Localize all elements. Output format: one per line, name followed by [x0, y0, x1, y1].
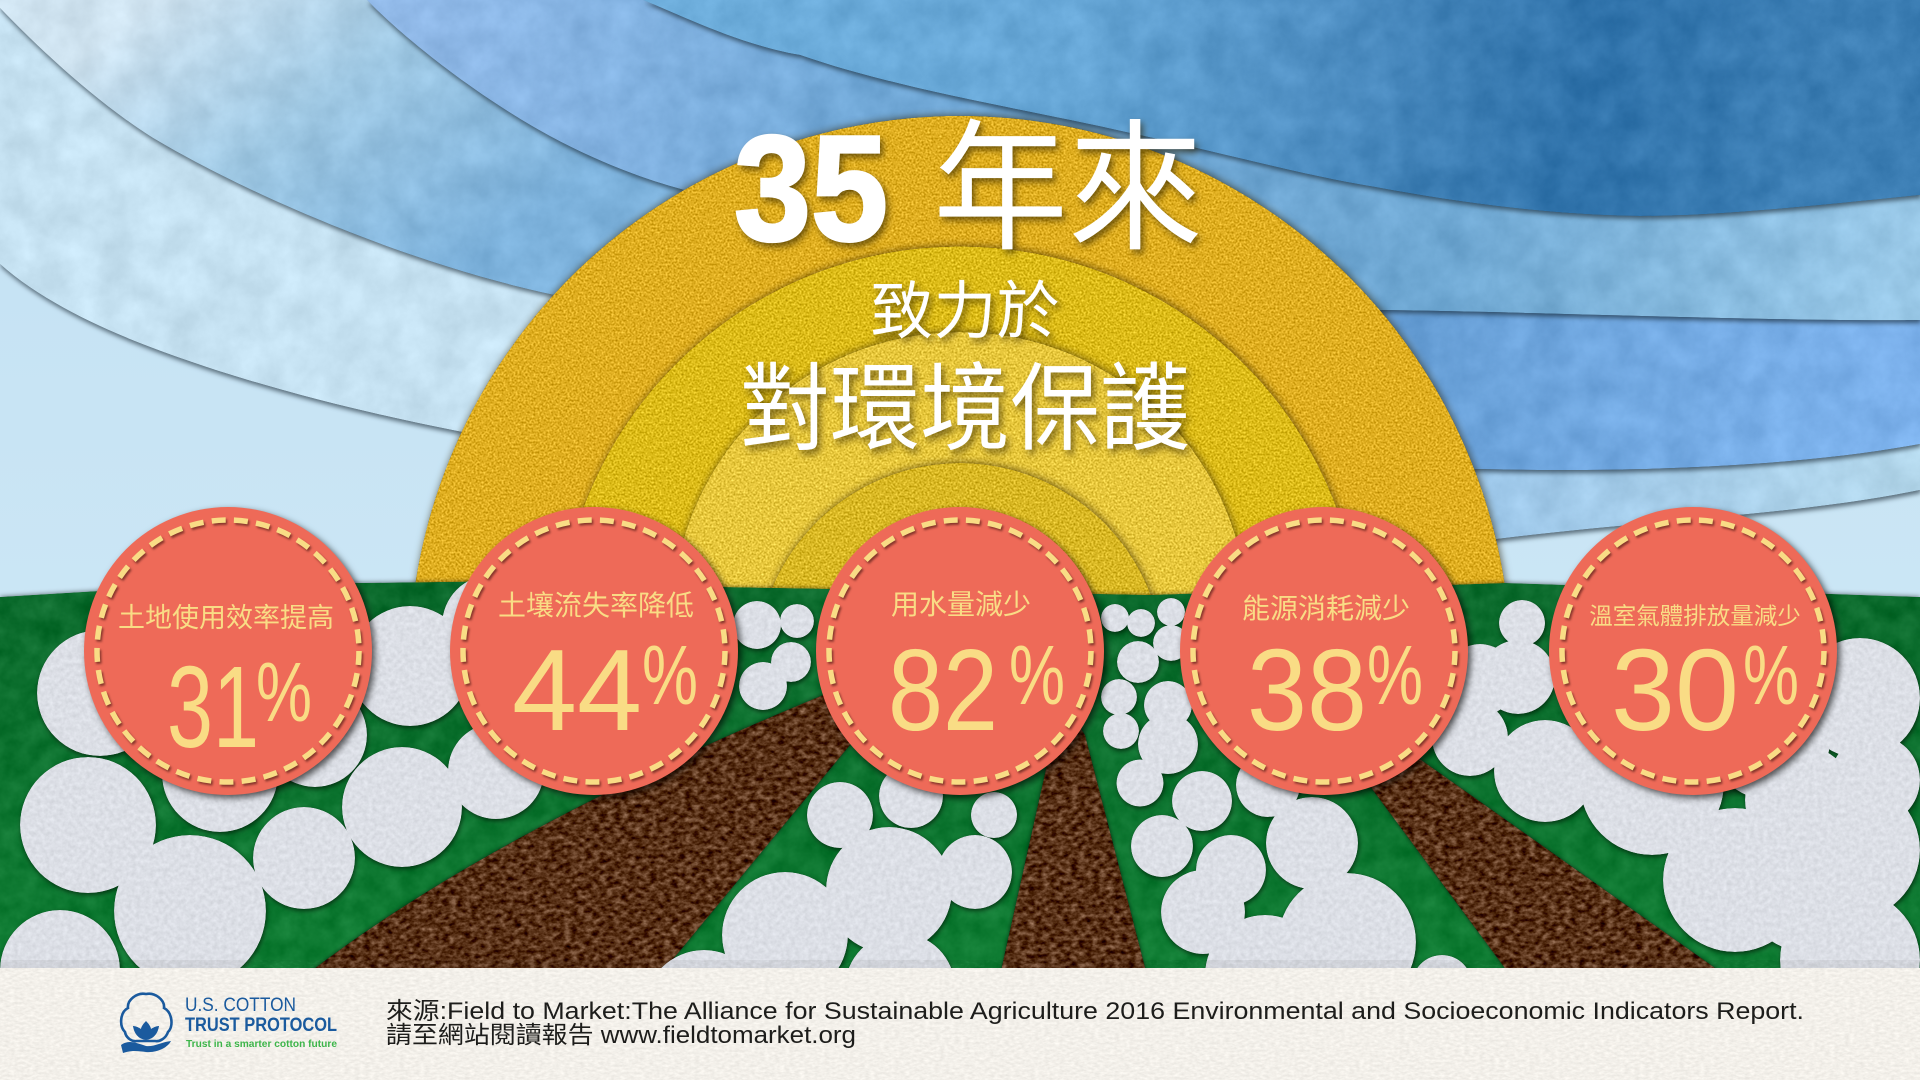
badge: energy use 38%: % — [1367, 628, 1423, 722]
title: 35 年來: 年來 — [933, 111, 1203, 269]
badge: water use 82%: % — [1009, 628, 1065, 722]
title: 35 年來: 35 — [734, 104, 888, 272]
logo text: U.S. COTTON: U.S. COTTON — [185, 995, 296, 1016]
badge: soil loss 44%: % — [642, 628, 698, 722]
sun ring: outer knit — [411, 116, 1509, 620]
source citation — [386, 998, 1804, 1049]
badge: energy use 38%: 能源消耗減少 — [1242, 593, 1410, 624]
source citation: 來源:Field to Market:The Alliance for Sustainable Agriculture 2016 Environmental and Socioeconomic Indicators Report. — [386, 998, 1804, 1025]
panel: green field — [0, 580, 1920, 975]
badge: soil loss 44% — [450, 507, 738, 795]
subtitle: 致力於: 致力於 — [870, 277, 1060, 347]
icon: cotton boll over hand — [121, 994, 171, 1053]
panel: brown soil furrows — [306, 680, 1725, 975]
sun ring: third — [672, 332, 1248, 620]
badge: land use efficiency 31%: % — [256, 645, 312, 739]
badge: land use efficiency 31%: 31 — [167, 642, 259, 772]
badge: greenhouse gas 30%: % — [1743, 628, 1799, 722]
title: 35 年來 — [734, 104, 1203, 272]
badge: greenhouse gas 30%: 溫室氣體排放量減少 — [1589, 603, 1801, 629]
logo text: tagline: Trust in a smarter cotton future — [186, 1038, 337, 1050]
panel: layered watercolor paper sky — [0, 0, 1920, 620]
badge: water use 82% — [816, 507, 1104, 795]
logo: U.S. Cotton Trust Protocol — [121, 994, 337, 1053]
badge: water use 82%: 82 — [888, 625, 998, 755]
badge: land use efficiency 31% — [84, 507, 372, 795]
badge: energy use 38% — [1180, 507, 1468, 795]
source citation: 請至網站閱讀報告 www.fieldtomarket.org — [386, 1022, 856, 1049]
panel: concentric fabric sun — [411, 116, 1509, 620]
badge: greenhouse gas 30%: 30 — [1611, 625, 1739, 755]
badge: greenhouse gas 30% — [1549, 507, 1837, 795]
badge: soil loss 44%: 44 — [512, 625, 642, 755]
cotton bolls: white felt circles — [0, 575, 1920, 1070]
badge: energy use 38%: 38 — [1247, 625, 1367, 755]
badge: land use efficiency 31%: 土地使用效率提高 — [118, 603, 334, 633]
badge: soil loss 44%: 土壤流失率降低 — [498, 590, 694, 621]
logo text: TRUST PROTOCOL: TRUST PROTOCOL — [185, 1015, 337, 1036]
panel: canvas footer — [0, 968, 1920, 1080]
sun ring: inner — [762, 463, 1158, 620]
subtitle: 對環境保護: 對環境保護 — [740, 356, 1190, 463]
sun ring: second canvas — [559, 246, 1361, 620]
badge: water use 82%: 用水量減少 — [891, 589, 1031, 620]
